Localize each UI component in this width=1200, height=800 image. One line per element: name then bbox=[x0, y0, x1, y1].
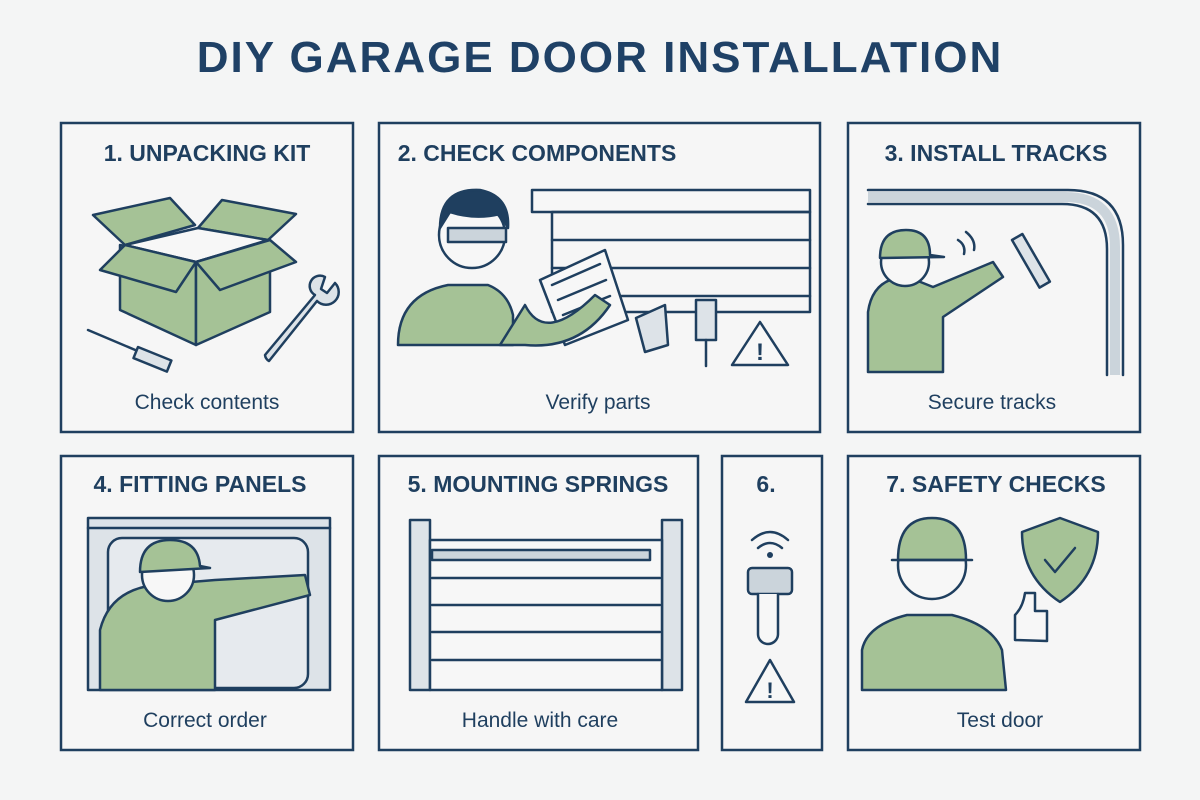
icon: open box bbox=[93, 198, 296, 345]
panel: 3 install tracks bbox=[848, 123, 1140, 432]
person with clipboard bbox=[398, 190, 628, 346]
panel: 2 check components bbox=[379, 123, 820, 432]
heading 2: 2. CHECK COMPONENTS bbox=[398, 140, 676, 166]
garage door frame bbox=[532, 190, 810, 312]
panel: 1 unpacking kit bbox=[61, 123, 353, 432]
icon: warning bbox=[746, 660, 794, 703]
panel: 6 bbox=[722, 456, 822, 750]
track bbox=[868, 190, 1123, 375]
heading 6: 6. bbox=[756, 471, 776, 497]
panel: 7 safety checks bbox=[848, 456, 1140, 750]
icon: wrench bbox=[265, 276, 339, 361]
heading 1: 1. UNPACKING KIT bbox=[104, 140, 310, 166]
icon: warning: ! bbox=[766, 678, 774, 703]
caption 3: Secure tracks bbox=[928, 391, 1056, 414]
caption 7: Test door bbox=[957, 709, 1043, 732]
title: DIY GARAGE DOOR INSTALLATION bbox=[197, 33, 1003, 82]
parts: bracket, spring, warning: ! bbox=[756, 339, 764, 366]
worker bbox=[868, 230, 1050, 372]
panel: 4 fitting panels bbox=[61, 456, 353, 750]
caption 5: Handle with care bbox=[462, 709, 618, 732]
worker pushing bbox=[100, 540, 310, 690]
panel: 5 mounting springs bbox=[379, 456, 698, 750]
heading 4: 4. FITTING PANELS bbox=[94, 471, 306, 497]
caption 1: Check contents bbox=[135, 391, 279, 414]
heading 5: 5. MOUNTING SPRINGS bbox=[408, 471, 668, 497]
parts: bracket, spring, warning bbox=[636, 300, 788, 366]
caption 4: Correct order bbox=[143, 709, 267, 732]
caption 2: Verify parts bbox=[545, 391, 651, 414]
door frame bbox=[88, 518, 330, 690]
icon: shield bbox=[1022, 518, 1098, 602]
heading 7: 7. SAFETY CHECKS bbox=[886, 471, 1106, 497]
icon: screwdriver bbox=[88, 330, 171, 372]
heading 3: 3. INSTALL TRACKS bbox=[885, 140, 1107, 166]
garage door with springs bbox=[410, 520, 682, 690]
icon: wifi remote bbox=[748, 532, 792, 644]
worker thumbs up bbox=[862, 518, 1047, 690]
